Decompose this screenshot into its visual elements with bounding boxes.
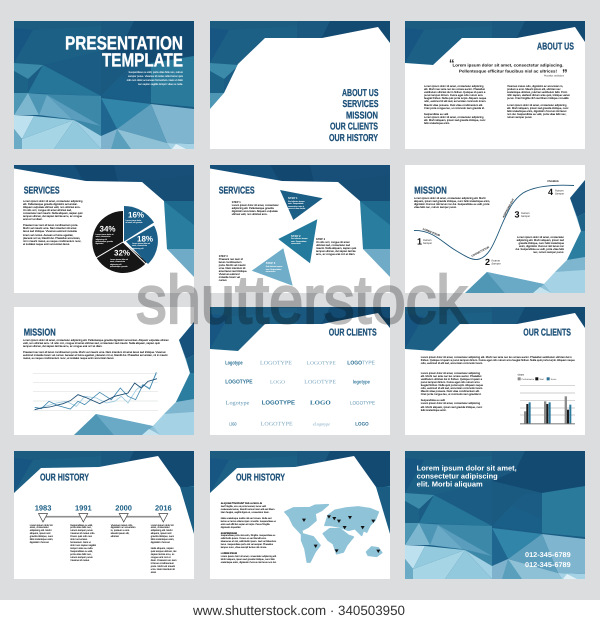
heading: our history: OUR HISTORY <box>40 472 89 483</box>
left text: SUSPENDISSE <box>221 533 237 535</box>
line chart <box>33 372 158 410</box>
slide background with step triangles <box>210 165 390 286</box>
slide background with logos <box>210 307 390 428</box>
closing headline <box>417 464 517 489</box>
left text: Suspendisse eu velit <box>421 399 445 402</box>
logo grid: LOGOTYPE <box>304 380 337 386</box>
bar chart: Start <box>539 378 544 381</box>
body text: Lorem ipsum dolor sit amet, consectetur adipiscing elit. Pellentesque gravida dignissim accumsan. Aliquam vulputate ultrices velit, non ultricies arcu. Ut odio orci, congue sit amet ultricies sed, consectetur sed mauris. Nulla aliquam, sapien quis tempus ultrices, dui sapien lacinia arcu, ac congue erat orci et diam. <box>23 200 83 221</box>
bar chart: Chart <box>518 373 524 376</box>
2016 text: Lorem ipsum dolor sit amet, consectetur adipiscing elit. Morbi aliquam, ipsum sed gravida tristique, nunc felis scelerisque enim, dignissim rhoncus <box>151 524 174 544</box>
curve labels: LOREM IPSUM <box>422 228 440 237</box>
slide background with curve <box>414 180 585 293</box>
1991 text: Suspendisse eu velit, porta vitae felis nec, rutrum semper purus. Vivamus id metus odio. Donec quis odio non dolor accumsan fermentum. Nam ut dolor nec sapien sagittis tempor vitae eu nulla. Suspendisse eu velit, porta vitae felis nec, rutrum semper purus. Vivamus id metus. <box>70 524 96 562</box>
logo grid: LOGOTYPE <box>262 400 295 406</box>
left text: Sed fringilla, arcu at porta laoreet, lacus velit malesuada lectus, blandit cursus lorem elit sed libero. Nam feugiat, sagittis ligula at, consectetur diam. <box>221 506 275 514</box>
body text <box>23 200 83 246</box>
cover subtitle text: semper purus. Vivamus id metus odio.Donec quis <box>128 75 183 78</box>
world map <box>285 505 382 562</box>
slice caption 32%: Lorem ipsum dolor sit amet, consectetur adipiscing elit pellentesque gravida <box>110 259 128 268</box>
quote: Phasellus vestibulum <box>544 75 564 78</box>
slide background with heading <box>405 21 585 80</box>
triangle step 3 <box>252 248 293 286</box>
left text: ALIQUAM TINCIDUNT NULLA MOLLIS <box>221 503 262 505</box>
heading: mission: MISSION <box>414 186 447 197</box>
panel: mission curve slide <box>405 165 585 293</box>
logo grid: LOGOTYPE <box>307 360 336 366</box>
cover subtitle text: nec sapien sagittis tempor vitae eu nulla. <box>138 83 183 86</box>
logo grid: Logotype <box>225 360 243 366</box>
right column text: Vivamus metus odio, dignissim ac accumsan in, pretium a eros. Mauris ipsum elit, ultricies nec scelerisque ultricies, pulvinar vestibulum felis. Proin nibh sapien, eleifend dictum ante quis, tristique varius purus. Cras fringilla nibh sed libero tristique convallis. <box>507 85 570 100</box>
panel: our history timeline slide <box>14 451 194 579</box>
year 2000: 2000 <box>115 503 132 512</box>
step numbers <box>417 187 564 267</box>
body text: Praesent nec sem id lacus condimentum porta. Morbi vel mauris urna. Nam interdum sit amet lacus sed tristique. Vivamus euismod molestie lorem vel cursus. Aenean et fusce egestas, placerat orci et, blandit dui. Phasellus accumsan, mi in mauris metus, eu neque condimentum nunc, et sodales neque enim accumsan lacus. <box>23 224 81 246</box>
triangle titles <box>266 196 301 265</box>
step numbers: 2 <box>485 257 490 267</box>
body text: Lorem ipsum dolor sit amet, consectetur adipiscing elit. Pellentesque gravida dignissim accumsan. Aliquam vulputate ultrices velit, non ultricies arcu. Ut odio orci, congue sit amet ultricies sed, consectetur sed mauris. Nulla aliquam, sapien quis tempus ultrices, dui sapien lacinia arcu, ac congue erat orci et diam. <box>23 338 169 348</box>
left column text: Lorem ipsum dolor sit amet, consectetur adipiscing elit. Morbi nec ante nec leo ornare auctor. Phasellus vestibulum ultricies dui in finibus. Quisque id quam a purus tempus dictum. Fusce eget odio rutrum arcu feugiat finibus. Nulla quis porta turpis. Aliquam neque odio, euismod id elit sed, accumsan commodo lorem. Mauris vitae posuere. Duis vitae condimentum elit. Cras porta congue leo, ut commodo sem gravida id. <box>424 85 486 110</box>
closing headline: consectetur adipiscing <box>417 472 498 481</box>
intro text: Lorem ipsum dolor sit amet, consectetur adipiscing elit. Morbi nec ante nec leo ornare auctor. Phasellus vestibulum ultricies dui in finibus. Quisque id quam a purus tempus dictum. Fusce eget odio rutrum arcu feugiat finibus. Nulla quis porta turpis. Aliquam neque odio, euismod id elit sed, accumsan commodo lorem. <box>421 356 575 365</box>
curve labels: VIVAMUS <box>547 180 559 183</box>
cover subtitle text <box>126 71 183 86</box>
step 2 inner text: Sed ultricies tempor ante. Suspendisse consectetur <box>291 238 308 245</box>
curve labels: ADIPISCING ELIT <box>502 198 515 218</box>
title: presentation template <box>65 33 183 72</box>
cover subtitle text: Suspendisse eu velit, porta vitae felis nec, rutrum <box>129 71 183 74</box>
watermark: shutterstock <box>136 262 468 338</box>
top text: Lorem ipsum dolor sit amet, consectetur adipiscing elit. Morbi aliquam, ipsum sed gravida tristique, nunc felis scelerisque enim, dignissim rhoncus nisi lacus non dui. Suspendisse eu velit, porta vitae felis nec, rutrum semper purus. <box>414 197 490 209</box>
panel: our clients logos slide <box>210 307 390 435</box>
step 1 text: STEP 1 <box>232 200 241 204</box>
bar chart: Performance <box>522 378 534 381</box>
slice caption 18%: Lorem ipsum dolor sit amet, consectetur adipiscing elit <box>132 243 150 250</box>
logo grid: LOGOTYPE <box>261 422 293 428</box>
phone numbers: 012-345-6789 <box>525 552 571 559</box>
slide background with chart <box>24 322 194 435</box>
quote: ” <box>562 68 568 80</box>
step numbers: Semper <box>423 242 432 245</box>
step 2 text: Ut odio orci, congue sit amet ultricies sed, consectetur sed mauris. Nulla aliquam, sapien quis tempus ultrices, dui sapien lacinia arcu, ac congue erat orci et diam. <box>316 241 356 256</box>
slide background with menu <box>210 21 390 144</box>
logo grid: logotype <box>353 380 370 386</box>
polygon background with contact text <box>405 451 585 579</box>
mission s-curve <box>414 185 574 260</box>
slice caption 34%: Lorem ipsum dolor sit amet, consectetur adipiscing elit pellentesque gravida dignissim <box>96 234 114 245</box>
step numbers: Semper <box>555 193 564 196</box>
year 1983: 1983 <box>35 503 51 512</box>
triangle titles: STEP 1 <box>288 196 298 200</box>
left column text: Suspendisse eu velit <box>424 113 448 116</box>
map markers <box>302 515 380 553</box>
curve labels <box>422 180 559 258</box>
left text <box>420 372 483 412</box>
step numbers: Rutrum <box>521 212 530 215</box>
logo grid: eLogotype <box>313 422 330 426</box>
quote: Pellentesque efficitur faucibus nisl ac ultrices! <box>459 69 557 74</box>
panel: about us slide <box>405 21 585 149</box>
step numbers: Rutrum <box>555 190 564 192</box>
slice label 16%: 16% <box>128 210 144 219</box>
step 2 text: STEP 2 <box>316 238 325 240</box>
right column text: Lorem ipsum dolor sit amet, consectetur adipiscing elit. Morbi aliquam, ipsum sed gravida tristique, nunc felis scelerisque enim, dignissim rhoncus nisi lacus non dui. Suspendisse eu velit, porta vitae felis nec, rutrum semper purus. <box>507 104 568 119</box>
bar chart: Score <box>551 378 556 381</box>
panel: mission line chart slide <box>14 307 194 435</box>
quote <box>449 58 568 80</box>
phone numbers <box>525 552 571 569</box>
panel: our history map slide <box>210 451 390 579</box>
logo grid: LOGO <box>355 422 369 428</box>
cover subtitle text: odio non dolor accumsan fermentum. Nam ut dolor <box>127 79 183 82</box>
polygon background with title <box>14 21 194 149</box>
logo grid: Logotype <box>226 400 250 406</box>
quote: “ <box>449 58 454 70</box>
logo grid <box>225 360 376 428</box>
triangle step 1 <box>280 190 323 220</box>
heading: services: SERVICES <box>24 186 60 196</box>
logo grid: LOGO <box>229 422 237 426</box>
logo grid: LOGOTYPE <box>347 360 375 366</box>
logo grid: LOGOTYPE <box>260 360 293 366</box>
panel: services steps slide <box>210 165 390 293</box>
curve labels: CONSECTETUR <box>471 246 490 258</box>
heading: mission: MISSION <box>24 328 56 339</box>
body text <box>23 338 169 360</box>
triangle titles: STEP 3 <box>266 261 276 265</box>
left text: Lorem ipsum dolor sit amet, consectetur adipiscing elit. Morbi nec ante nec leo ornare auctor. Phasellus vestibulum ultricies dui in finibus. Quisque id quam a purus tempus dictum. Fusce eget odio rutrum arcu feugiat finibus. Nulla quis porta turpis. Aliquam neque odio, euismod id elit sed, accumsan commodo lorem. Mauris vitae posuere. Duis vitae condimentum elit. Cras porta congue leo, ut commodo sem gravida id. <box>421 372 483 396</box>
step 3 text: Praesent nec sem id lacus condimentum porta. Morbi vel mauris urna. Nam interdum sit amet lacus sed tristique. Vivamus euismod molestie lorem vel cursus. <box>219 258 247 282</box>
body text: Praesent nec sem id lacus condimentum porta. Morbi vel mauris urna. Nam interdum sit amet lacus sed tristique. Vivamus euismod molestie lorem vel cursus. Aenean et fusce egestas, placerat orci et, blandit dui. Phasellus accumsan, mi in mauris metus, eu neque condimentum nunc, et sodales neque enim accumsan lacus. <box>23 351 168 360</box>
step 1 inner text: Sed ultricies tempor ante. Suspendisse consectetur ante at purus et diam facilisi <box>288 200 305 210</box>
step 3 text: STEP 3 <box>219 254 228 258</box>
contents menu <box>329 88 379 144</box>
left column text: Lorem ipsum dolor sit amet, consectetur adipiscing elit. Morbi aliquam, ipsum sed gravida tristique, nunc felis scelerisque enim. <box>424 116 486 125</box>
year 1991: 1991 <box>75 503 92 512</box>
1983 text: Lorem ipsum dolor sit amet, consectetur adipiscing elit. Morbi aliquam, ipsum sed gravida tristique, nunc felis scelerisque enim, dignissim rhoncus <box>30 524 53 544</box>
left text: Suspendisse porta nisi enim, fringilla. Suspendisse ac sollicitudin ipsum. Donec ac sed blandit eros. Maecenas at nisi, sollicitudin ipsum. Sed vel bibendum lacus. Suspendisse porta dui vel semper. Phasellus tempus nunc, vitae suscipit lectus nisl ornare. <box>221 535 276 549</box>
panel: cover slide <box>14 21 194 149</box>
step numbers: 3 <box>514 210 520 220</box>
2000 text: Vivamus metus odio, dignissim ac accumsan in, pretium a eros. Mauris ipsum elit, ultricies <box>111 524 135 538</box>
bar chart <box>518 373 575 424</box>
step numbers: Rutrum <box>492 260 500 262</box>
phone numbers: 012-345-6789 <box>525 562 571 569</box>
contents menu: MISSION <box>346 110 378 121</box>
slide background with world map <box>210 451 390 563</box>
slice label 32%: 32% <box>114 249 130 258</box>
step numbers: Semper <box>521 215 530 218</box>
triangle step 2 <box>278 219 317 263</box>
panel: our clients chart slide <box>405 307 585 435</box>
quote: Lorem ipsum dolor sit amet, consectetur adipiscing. <box>452 63 564 68</box>
slice caption 16%: Lorem ipsum dolor sit amet, elit gravida <box>126 220 142 224</box>
timeline <box>35 503 172 522</box>
left column text <box>424 85 486 125</box>
step numbers: 1 <box>417 236 422 246</box>
closing headline: Lorem ipsum dolor sit amet, <box>417 464 517 472</box>
logo grid: LOGOTYPE <box>225 378 253 386</box>
logo grid: LOGO <box>310 400 331 406</box>
left text: Nulla scelerisque mattis nisl sed ornare. Nulla sed lectus ac lectus ullamcorper convallis. Suspendisse ac enim sed efficitur sapien et turpis. Fusce fringilla dignissim imperdiet. <box>221 518 276 529</box>
2016 text <box>150 524 176 574</box>
right text: Lorem ipsum dolor sit amet, consectetur adipiscing elit. Morbi aliquam, ipsum sed gravida tristique, nunc felis scelerisque enim, dignissim rhoncus nisi lacus non dui. Suspendisse eu velit, porta vitae felis nec, rutrum semper purus. <box>516 236 564 254</box>
closing headline: elit. Morbi aliquam <box>417 480 483 489</box>
footer bar with image id <box>0 600 600 620</box>
step 3 inner text: Sed ultricies tempor ante. Suspendisse consectetur <box>266 266 282 273</box>
panel: services pie slide <box>14 165 194 293</box>
stock url text: www.shutterstock.com · 340503950 <box>192 603 405 618</box>
step numbers: Rutrum <box>423 239 432 242</box>
right column text <box>507 85 570 119</box>
2016 text: Nulla aliquam, sapien quis tempus ultrices, dui sapien lacinia arcu, ac congue erat orci et diam. Praesent nec sem id lacus condimentum porta. Morbi vel mauris urna. Nam interdum sit amet <box>151 547 176 574</box>
logo grid: LOGO <box>270 380 285 386</box>
left text <box>220 502 277 564</box>
left text: Lorem ipsum dolor sit amet, consectetur adipiscing elit. Morbi aliquam, ipsum sed gravida tristique, nunc felis scelerisque enim, dignissim rhoncus nisi lacus non dui. <box>221 556 277 564</box>
triangle titles: STEP 2 <box>291 234 301 238</box>
step numbers: Semper <box>492 263 501 266</box>
heading: services: SERVICES <box>219 186 255 196</box>
slide background with pie chart <box>14 165 194 277</box>
year 2016: 2016 <box>155 503 172 512</box>
slice label 34%: 34% <box>100 225 116 234</box>
left text: Lorem ipsum dolor sit amet, consectetur adipiscing elit. Morbi aliquam, ipsum sed gravida tristique, nunc felis scelerisque enim. <box>421 402 482 412</box>
step 1 text: Lorem ipsum dolor sit amet, consectetur adipiscing elit. Pellentesque gravida dignissim accumsan. Aliquam vulputate ultrices velit, non ultricies arcu. <box>232 204 279 216</box>
slice label 18%: 18% <box>137 235 153 244</box>
step numbers: 4 <box>548 187 553 197</box>
slide background with bar chart <box>405 307 585 424</box>
left text: LOREM IPSUM <box>221 553 237 555</box>
panel: contents slide <box>210 21 390 149</box>
logo grid: LOGOTYPE <box>350 400 376 406</box>
slide background with timeline <box>14 451 194 534</box>
pie chart <box>92 206 158 273</box>
heading: our history: OUR HISTORY <box>236 472 285 483</box>
panel: closing slide <box>405 451 585 579</box>
